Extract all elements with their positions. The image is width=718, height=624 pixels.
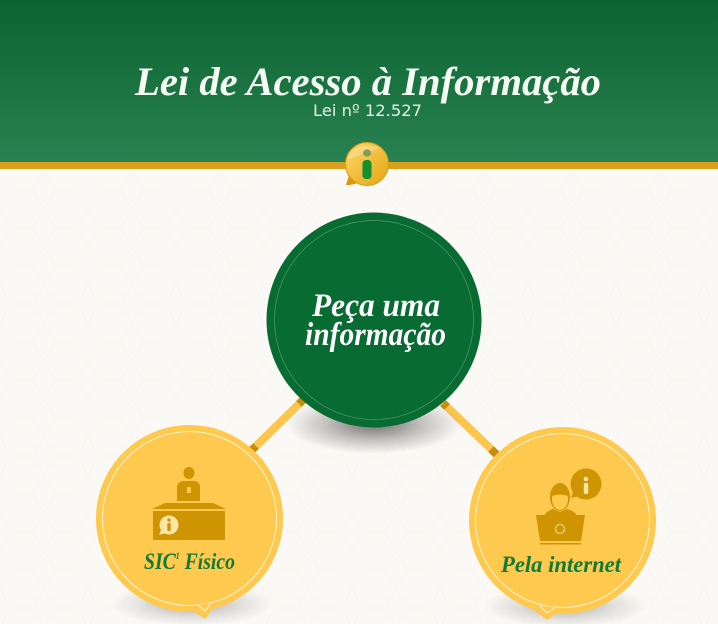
heading: Peça uma informação <box>305 288 446 353</box>
shadow: main circle <box>286 394 462 454</box>
label: SIC físico: Físico <box>180 549 235 574</box>
header band <box>0 0 718 169</box>
panel: Peça uma informação <box>266 212 482 428</box>
shadow: left circle <box>110 582 274 624</box>
heading: Peça uma informação: Peça uma <box>311 288 440 324</box>
panel: SIC físico <box>96 425 283 619</box>
panel: Pela internet <box>469 427 656 620</box>
connector left <box>250 400 303 452</box>
icon: attendant at desk <box>152 467 226 540</box>
shadow: right circle <box>483 584 647 624</box>
label: Pela internet: Pela internet <box>500 552 622 577</box>
icon: information speech bubble <box>346 142 388 186</box>
label: SIC físico: SIC <box>144 549 181 574</box>
icon: person with laptop <box>536 468 602 544</box>
title: Lei de Acesso à Informação <box>134 59 601 104</box>
connector right <box>443 403 497 455</box>
label: SIC físico: 1 <box>176 551 180 561</box>
subtitle: Lei nº 12.527 <box>313 101 422 120</box>
label: SIC físico <box>144 549 235 574</box>
heading: Peça uma informação: informação <box>305 317 446 353</box>
